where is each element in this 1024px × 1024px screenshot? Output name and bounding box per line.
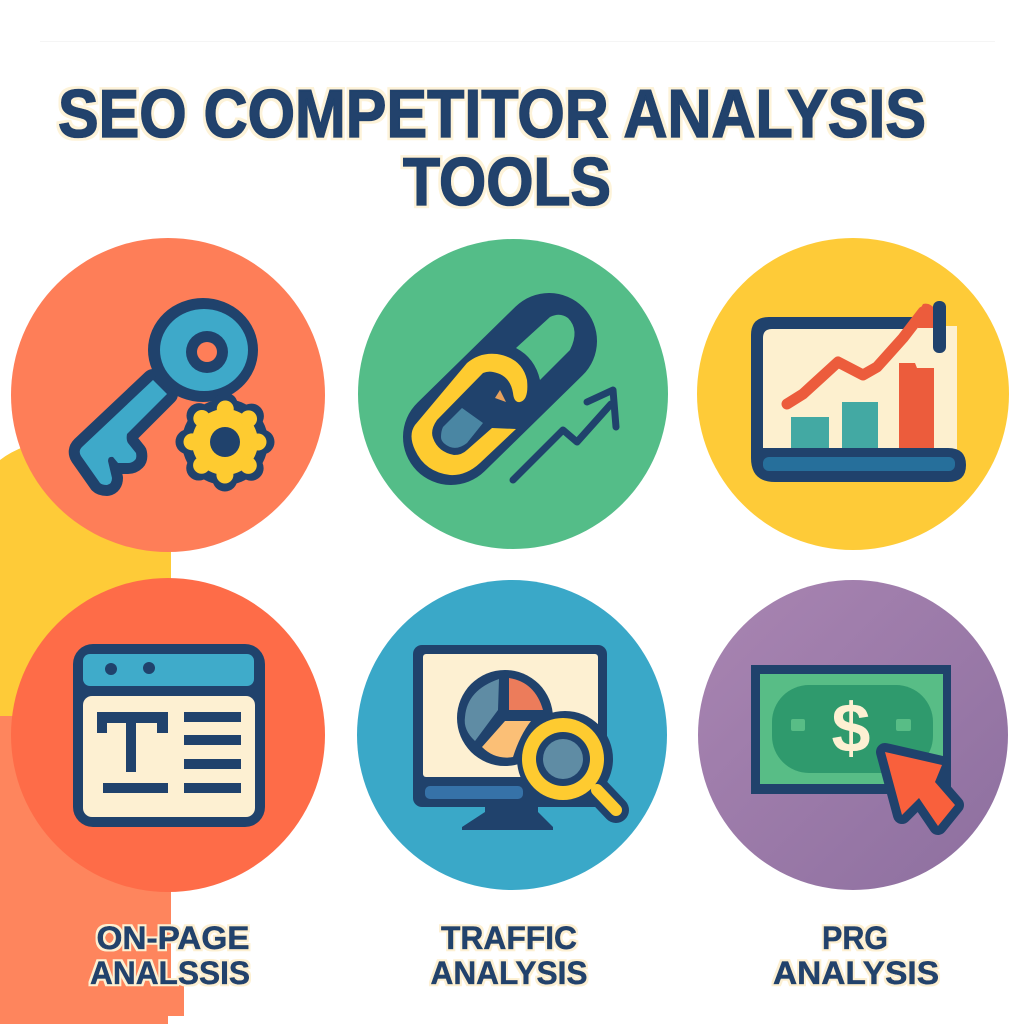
icon: magnifier [517,711,616,810]
icon: laptop screen [751,317,957,451]
label: ppc analysis: ANALYSIS [773,955,939,991]
icon: chain link yellow [412,354,527,475]
label: traffic analysis: TRAFFIC [441,920,577,956]
icon: T letter and lines [97,712,241,793]
panel: traffic icon circle [357,580,667,890]
icon: key [80,298,258,485]
label: traffic analysis [430,920,588,991]
panel: link icon circle [358,239,668,549]
panel: chart icon circle [697,238,1009,550]
icon: chain link dark [451,315,575,437]
icon: laptop base [751,448,966,482]
icon: trend line [787,301,946,404]
label: on-page analysis: ON-PAGE [96,920,250,956]
panel: keyword icon circle [11,238,325,552]
title [58,76,926,220]
panel: PPC icon circle [698,580,1008,890]
background yellow shape [0,444,171,720]
label: on-page analysis: ANALSSIS [90,955,250,991]
icon: browser window [73,644,265,827]
label: on-page analysis [90,920,250,991]
icon: cursor arrow [885,752,955,826]
icon: monitor [413,645,607,830]
icon: gear [182,399,268,485]
icon: banknote [751,665,951,794]
icon: trend arrow [513,390,616,480]
icon: banknote: $ [832,689,870,767]
title: SEO COMPETITOR ANALYSIS [58,76,926,152]
label: ppc analysis: PRG [822,920,888,956]
icon: pie chart [457,670,553,766]
label: traffic analysis: ANALYSIS [430,955,588,991]
panel: on-page icon circle [11,578,325,892]
title: TOOLS [403,144,611,220]
icon: link highlight [441,390,506,448]
icon: bars [791,363,934,449]
label: ppc analysis [773,920,939,991]
background orange shape [0,716,184,1024]
